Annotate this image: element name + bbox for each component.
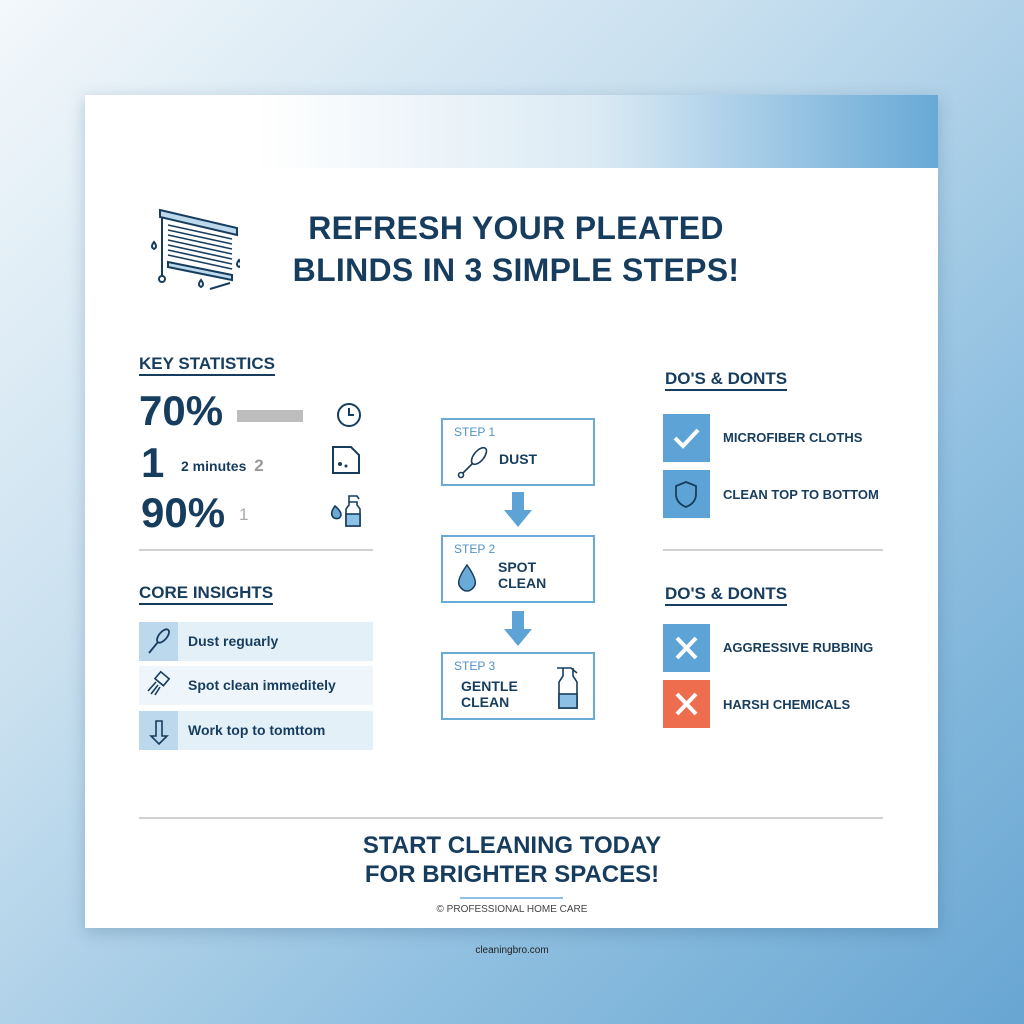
title xyxy=(293,210,739,288)
card xyxy=(85,95,938,928)
title: REFRESH YOUR PLEATED xyxy=(308,210,724,246)
heading: don'ts: DO'S & DONTS xyxy=(665,584,787,603)
insight: spot clean: Spot clean immeditely xyxy=(188,677,336,693)
step 2: STEP 2 xyxy=(454,542,495,556)
step 1: STEP 1 xyxy=(454,425,495,439)
title: BLINDS IN 3 SIMPLE STEPS! xyxy=(293,252,739,288)
heading: do's: DO'S & DONTS xyxy=(665,369,787,388)
step 3 xyxy=(441,652,595,720)
insight: spot clean xyxy=(139,666,373,705)
step 3: CLEAN xyxy=(461,694,509,710)
footer call to action: START CLEANING TODAY xyxy=(363,832,661,859)
credit: © PROFESSIONAL HOME CARE xyxy=(437,904,587,915)
insight: top to bottom: Work top to tomttom xyxy=(188,722,325,738)
heading: core insights: CORE INSIGHTS xyxy=(139,583,273,602)
icon: spray bottle xyxy=(557,667,578,709)
panel: key statistics: 1 xyxy=(239,505,248,524)
text: AGGRESSIVE RUBBING xyxy=(723,640,873,655)
footer call to action xyxy=(363,832,661,888)
icon: clock xyxy=(337,403,361,427)
arrow 2 xyxy=(504,611,532,646)
website: cleaningbro.com xyxy=(475,945,549,956)
icon: duster xyxy=(458,446,488,478)
arrow 1 xyxy=(504,492,532,527)
icon: paper xyxy=(332,446,360,474)
header band xyxy=(85,95,938,168)
stat 90%: 90% xyxy=(141,489,225,536)
insight: dust: Dust reguarly xyxy=(188,633,278,649)
do: top to bottom xyxy=(663,470,710,518)
step 2 xyxy=(441,535,595,603)
dont: rubbing xyxy=(663,624,710,672)
step 1 xyxy=(441,418,595,486)
icon: blind xyxy=(151,208,240,290)
text: CLEAN TOP TO BOTTOM xyxy=(723,487,879,502)
stat 70%: 70% xyxy=(139,387,223,434)
insight: dust xyxy=(139,622,373,661)
panel: key statistics: 2 minutes 2 xyxy=(181,456,264,475)
step 1: DUST xyxy=(499,451,537,467)
heading: key statistics: KEY STATISTICS xyxy=(139,354,275,373)
insight: top to bottom xyxy=(139,711,373,750)
text: HARSH CHEMICALS xyxy=(723,697,850,712)
dont: chemicals xyxy=(663,680,710,728)
footer call to action: FOR BRIGHTER SPACES! xyxy=(365,861,659,888)
icon: drop xyxy=(458,564,476,592)
text: MICROFIBER CLOTHS xyxy=(723,430,862,445)
step 3: STEP 3 xyxy=(454,659,495,673)
step 2: CLEAN xyxy=(498,575,546,591)
do: microfiber xyxy=(663,414,710,462)
panel: key statistics xyxy=(139,354,361,536)
step 3: GENTLE xyxy=(461,678,518,694)
step 2: SPOT xyxy=(498,559,536,575)
icon: drop and bottle xyxy=(330,495,361,527)
stat 1: 1 xyxy=(141,439,164,486)
